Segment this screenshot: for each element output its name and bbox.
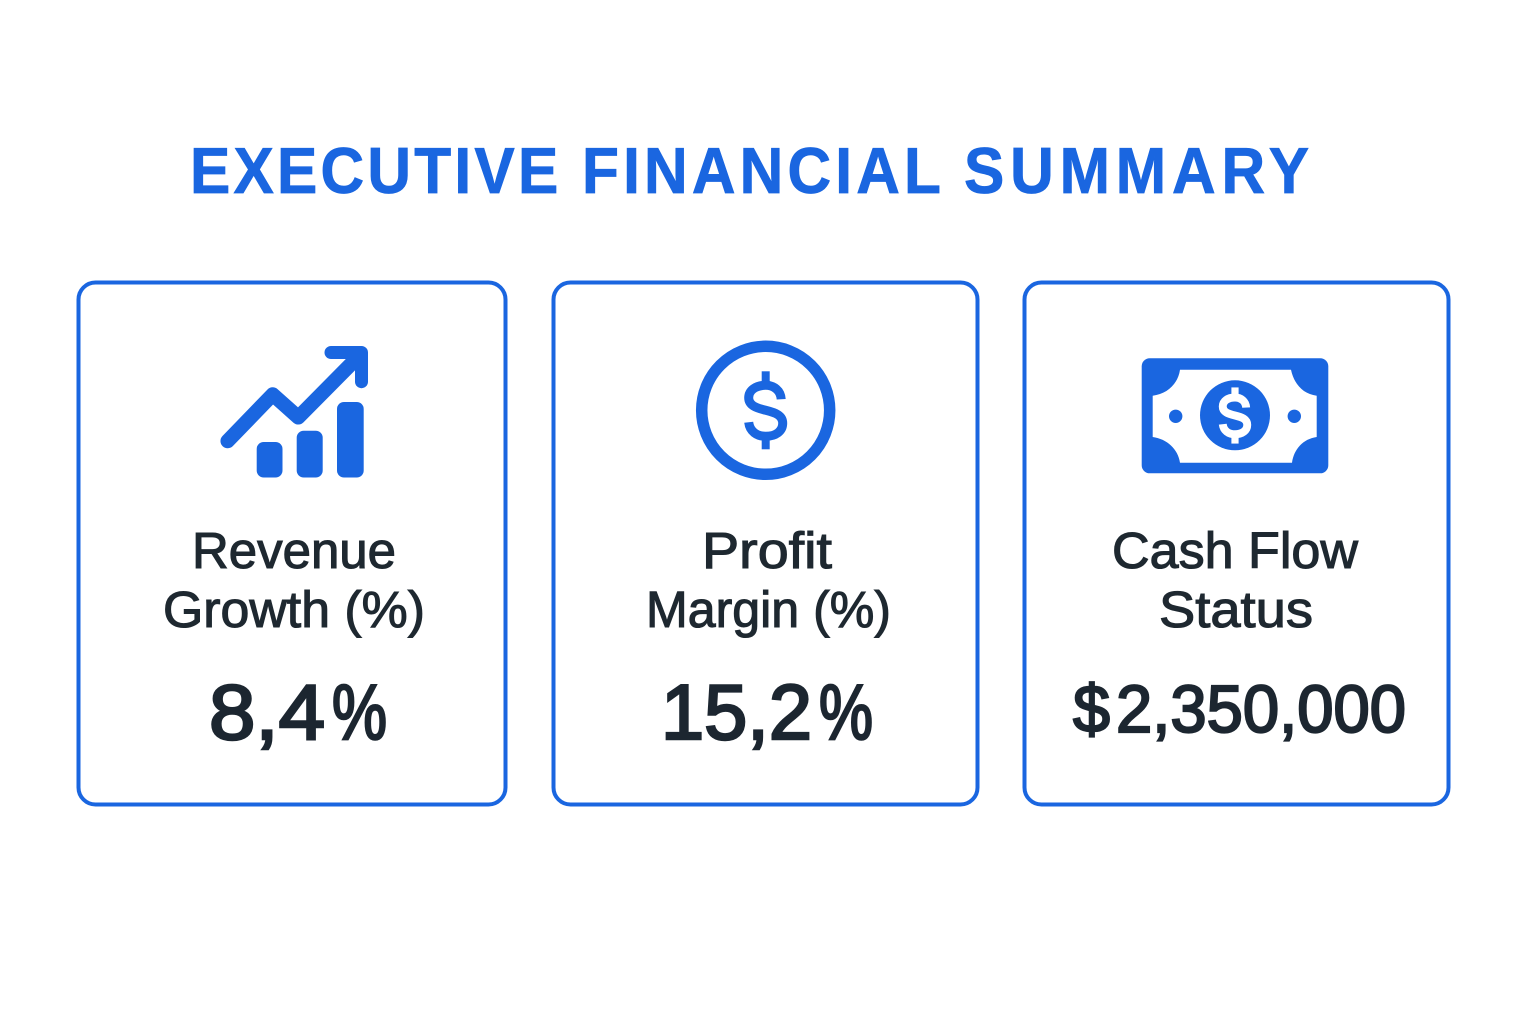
value: profit margin: % — [819, 668, 873, 756]
label: revenue growth — [163, 522, 425, 638]
value: revenue growth — [209, 668, 387, 756]
title: FINANCIAL — [582, 135, 941, 207]
label: profit margin: Profit — [702, 522, 832, 579]
value: cash flow status: 2,350,000 — [1116, 672, 1406, 747]
label: cash flow status: Status — [1159, 581, 1313, 638]
icon: banknote — [1142, 358, 1328, 473]
value: revenue growth: 8,4 — [209, 668, 325, 756]
label: revenue growth: Revenue — [192, 522, 396, 579]
panel: profit margin — [554, 282, 978, 804]
label: revenue growth: Growth (%) — [163, 581, 425, 638]
title: SUMMARY — [964, 135, 1309, 207]
label: profit margin: Margin (%) — [646, 581, 891, 638]
label: cash flow status: Cash Flow — [1112, 522, 1358, 579]
value: cash flow status: $ — [1073, 672, 1110, 747]
label: cash flow status — [1112, 522, 1358, 638]
label: profit margin — [646, 522, 891, 638]
icon: rising chart with arrow — [228, 352, 364, 478]
panel: cash flow status — [1024, 282, 1448, 804]
value: profit margin: 15,2 — [661, 668, 812, 756]
panel: revenue growth — [78, 282, 506, 804]
icon: dollar coin — [702, 346, 830, 474]
value: revenue growth: % — [332, 668, 387, 756]
title: EXECUTIVE — [190, 135, 558, 207]
title — [190, 135, 1309, 207]
